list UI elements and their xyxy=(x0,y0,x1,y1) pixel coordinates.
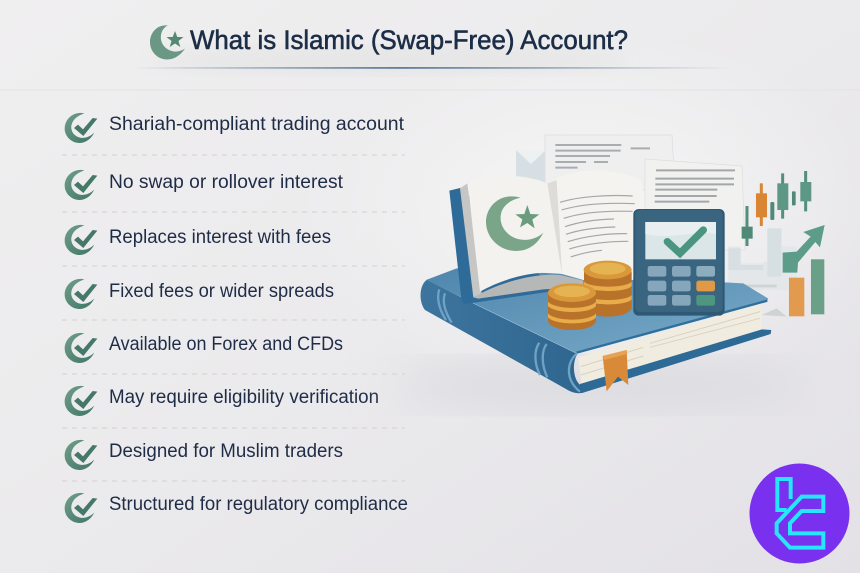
front stack xyxy=(548,283,596,330)
faded skyline xyxy=(728,228,797,290)
checklist xyxy=(62,113,408,523)
page block xyxy=(578,303,762,386)
lower page stack xyxy=(473,275,583,299)
logo badge xyxy=(750,464,850,564)
growth arrow xyxy=(783,225,825,273)
title text: What is Islamic (Swap-Free) Account? xyxy=(190,25,628,55)
crescent and star emblem xyxy=(486,196,543,251)
open book xyxy=(449,170,645,304)
trading chart xyxy=(728,171,825,317)
calculator screen xyxy=(645,222,716,259)
item: Shariah-compliant trading account: Shariah-compliant trading account xyxy=(109,114,405,135)
item: May require eligibility verification xyxy=(65,386,379,416)
item: No swap or rollover interest: No swap or rollover interest xyxy=(109,172,344,193)
item: Designed for Muslim traders: Designed for Muslim traders xyxy=(109,441,343,462)
right page xyxy=(547,170,645,280)
top cover xyxy=(426,268,768,353)
icon: crescent and star xyxy=(150,25,185,60)
left page xyxy=(468,176,562,292)
item: Shariah-compliant trading account xyxy=(65,113,405,143)
candlesticks xyxy=(742,171,811,246)
item: Designed for Muslim traders xyxy=(65,440,343,470)
rear stack xyxy=(584,261,632,317)
documents behind the book xyxy=(516,135,745,250)
page text lines xyxy=(560,196,635,257)
page edge xyxy=(460,183,482,297)
item: Replaces interest with fees xyxy=(65,225,331,255)
spine xyxy=(421,280,583,393)
item: Available on Forex and CFDs: Available on Forex and CFDs xyxy=(109,334,343,355)
closed book xyxy=(421,268,771,393)
calculator keys xyxy=(648,266,715,306)
item: Fixed fees or wider spreads xyxy=(65,279,334,309)
illustration: book, coins, calculator and chart xyxy=(390,135,825,411)
check mark xyxy=(667,230,703,253)
item: Structured for regulatory compliance: Structured for regulatory compliance xyxy=(109,494,408,515)
item: May require eligibility verification: May require eligibility verification xyxy=(109,387,379,408)
calculator xyxy=(633,209,725,316)
item: Fixed fees or wider spreads: Fixed fees or wider spreads xyxy=(109,281,334,302)
title underline xyxy=(130,67,730,69)
item: No swap or rollover interest xyxy=(65,170,344,200)
bottom cover edge xyxy=(578,329,771,393)
bars xyxy=(789,278,804,316)
title xyxy=(150,25,628,60)
coin stacks xyxy=(548,261,632,330)
soft shadow under book xyxy=(390,359,810,411)
board behind the pages xyxy=(449,188,550,304)
item: Structured for regulatory compliance xyxy=(65,493,408,523)
bookmark xyxy=(603,350,628,391)
item: Available on Forex and CFDs xyxy=(65,333,343,363)
item: Replaces interest with fees: Replaces interest with fees xyxy=(109,227,331,248)
